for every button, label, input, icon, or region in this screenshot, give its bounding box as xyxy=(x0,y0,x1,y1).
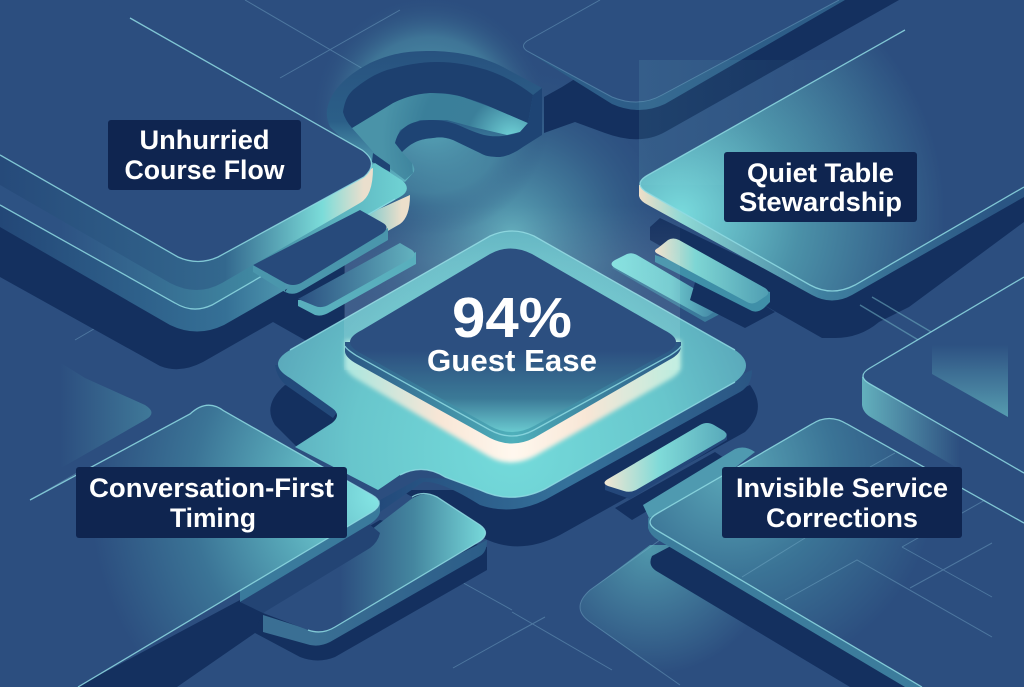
tab one xyxy=(253,228,388,294)
label: Quiet Table Stewardship: Stewardship xyxy=(739,187,902,217)
surface xyxy=(650,418,1024,687)
label: Invisible Service Corrections: Invisible Service xyxy=(736,473,948,503)
tab: upper right small C xyxy=(612,253,720,322)
hub platform xyxy=(275,231,752,512)
label: Unhurried Course Flow xyxy=(108,120,301,190)
side xyxy=(263,540,487,646)
label: Unhurried Course Flow: Course Flow xyxy=(124,155,285,185)
panel: conversation xyxy=(0,405,380,687)
ghost panel: left xyxy=(0,325,152,503)
layer 1 surface xyxy=(0,0,372,262)
label: Invisible Service Corrections: Corrections xyxy=(766,503,918,533)
panel: conversation shadow and tab xyxy=(77,494,487,687)
hub top plate xyxy=(345,248,681,444)
label: Quiet Table Stewardship: Quiet Table xyxy=(747,158,894,188)
panel: top left stack xyxy=(0,0,416,332)
side xyxy=(639,180,1024,300)
inner wall xyxy=(343,62,533,128)
arch: curved channel behind hub xyxy=(327,51,542,182)
glass overlay upper right xyxy=(639,60,880,185)
surface xyxy=(263,494,486,632)
recessed floor xyxy=(352,93,528,180)
layer 1 side xyxy=(0,152,373,290)
surface xyxy=(278,231,746,497)
value: 94% xyxy=(452,286,572,350)
label: Invisible Service Corrections xyxy=(722,467,962,538)
shadow xyxy=(650,195,1024,338)
ghost panel: bottom centre right xyxy=(580,540,860,687)
panel: right middle xyxy=(862,270,1024,507)
layer 2 side xyxy=(0,195,410,332)
tab: lower right cream xyxy=(604,423,727,499)
surface xyxy=(640,0,1024,291)
hole band xyxy=(395,88,542,157)
side xyxy=(345,342,681,444)
shadow xyxy=(650,530,960,687)
side xyxy=(275,365,752,512)
glass overlay centre xyxy=(344,205,680,370)
layer 2 surface xyxy=(0,163,407,309)
caption: Guest Ease xyxy=(427,343,597,378)
top left cast shadow xyxy=(0,225,345,369)
side xyxy=(648,500,950,687)
panel: bottom right xyxy=(648,418,1024,687)
glow band xyxy=(345,340,681,462)
panel: top right stack xyxy=(639,0,1024,350)
tab: upper right small B xyxy=(655,238,775,328)
label: Quiet Table Stewardship xyxy=(724,152,917,222)
label: Conversation-First Timing: Timing xyxy=(170,503,256,533)
cast shadow xyxy=(240,523,380,613)
hub shadow xyxy=(270,385,758,546)
label: Conversation-First Timing: Conversation-First xyxy=(89,473,334,503)
rim xyxy=(327,51,542,182)
tab: lower right teal xyxy=(615,448,755,520)
hidden shadow xyxy=(372,153,390,172)
hero stat xyxy=(427,286,597,378)
surface xyxy=(350,248,676,432)
label: Unhurried Course Flow: Unhurried xyxy=(140,125,270,155)
label: Conversation-First Timing xyxy=(76,467,347,538)
panel: top centre xyxy=(524,0,899,139)
tab two xyxy=(298,252,416,316)
